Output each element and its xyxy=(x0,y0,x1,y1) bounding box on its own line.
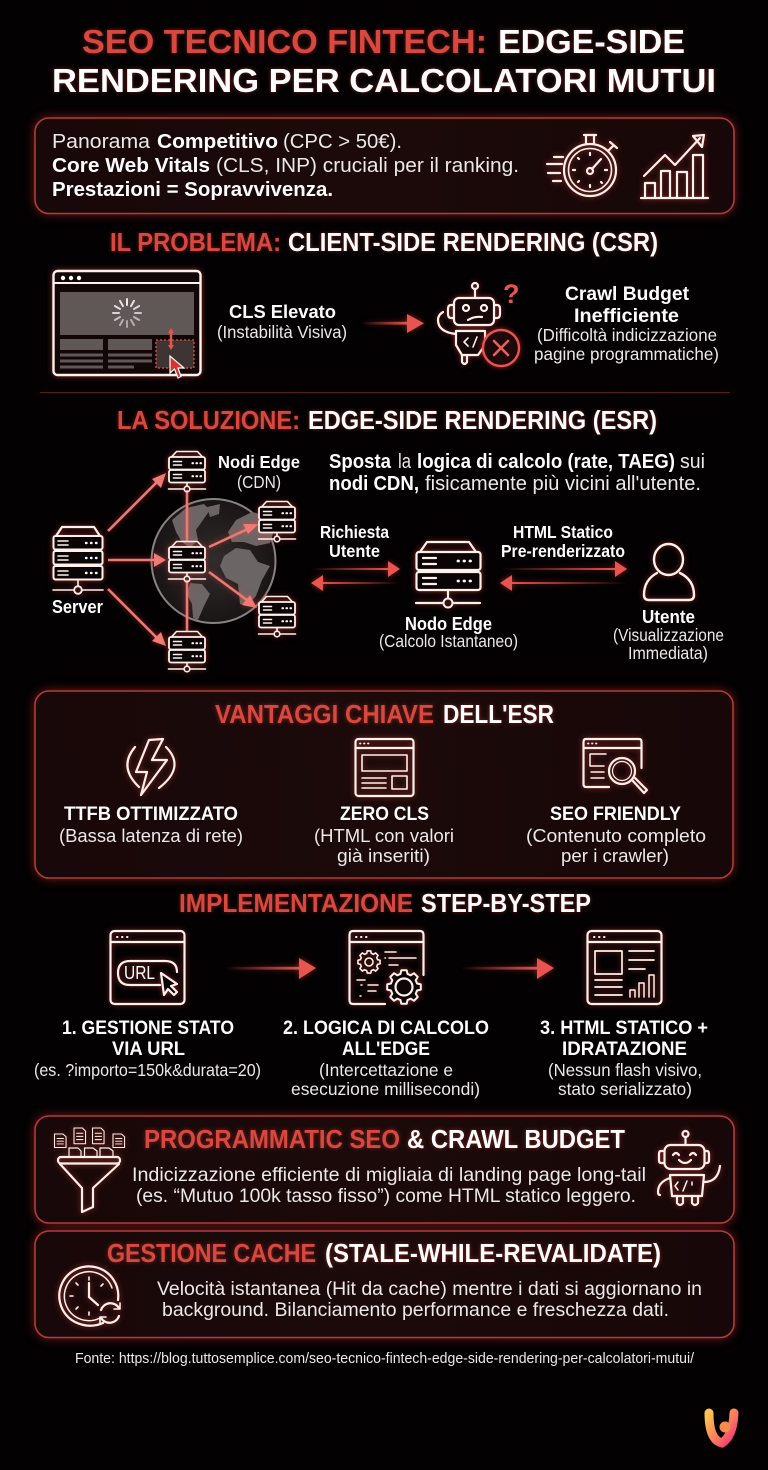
label: cls elevato xyxy=(217,301,347,342)
label: html statico: HTML Statico xyxy=(513,522,613,542)
label: utente: (Visualizzazione xyxy=(613,625,724,645)
icon: browser layout xyxy=(356,739,414,796)
heading: programmatic seo: & CRAWL BUDGET xyxy=(407,1126,625,1154)
heading: implementazione: STEP-BY-STEP xyxy=(421,890,591,918)
step 2 text: ALL'EDGE xyxy=(342,1038,430,1060)
text: programmatic seo xyxy=(132,1164,646,1207)
benefit: ttfb: TTFB OTTIMIZZATO xyxy=(64,803,238,825)
label: crawl budget xyxy=(534,283,719,364)
benefit: seo friendly: per i crawler) xyxy=(561,845,669,866)
title xyxy=(52,23,716,99)
step 2 xyxy=(283,931,489,1099)
intro text: Core Web Vitals xyxy=(52,154,210,177)
label: crawl budget: pagine programmatiche) xyxy=(534,344,719,364)
intro text: (CPC > 50€). xyxy=(283,130,402,153)
label: html statico xyxy=(501,522,625,561)
text: programmatic seo: Indicizzazione efficiente di migliaia di landing page long-tail xyxy=(132,1164,646,1186)
label: richiesta utente: Richiesta xyxy=(320,522,389,542)
text: soluzione description: la xyxy=(398,450,411,473)
spinner xyxy=(113,299,141,327)
icon: happy robot xyxy=(658,1131,720,1205)
logo xyxy=(709,1413,734,1443)
icon: user xyxy=(644,544,694,600)
label: utente xyxy=(613,606,724,663)
heading: il problema: CLIENT-SIDE RENDERING (CSR) xyxy=(288,229,658,257)
label: nodi edge: Nodi Edge xyxy=(218,452,300,472)
icon: url browser: URL xyxy=(124,963,155,983)
step 3 text xyxy=(540,1017,708,1099)
label: crawl budget: Crawl Budget xyxy=(565,283,689,305)
arrow: step 1 to 2 xyxy=(224,958,316,979)
text: soluzione description: sui xyxy=(680,450,705,473)
heading: gestione cache: (STALE-WHILE-REVALIDATE) xyxy=(325,1240,661,1268)
label: cls elevato: (Instabilità Visiva) xyxy=(217,322,347,342)
text: gestione cache xyxy=(157,1278,702,1321)
label: nodi edge xyxy=(218,452,300,492)
text: programmatic seo: (es. “Mutuo 100k tasso fisso”) come HTML statico leggero. xyxy=(136,1185,636,1207)
intro text: (CLS, INP) cruciali per il ranking. xyxy=(216,154,519,177)
label: crawl budget: (Difficoltà indicizzazione xyxy=(537,325,717,345)
title: EDGE-SIDE xyxy=(498,23,685,60)
benefit: ttfb xyxy=(59,803,243,846)
text: soluzione description: logica di calcolo (rate, TAEG) xyxy=(417,450,675,473)
benefit: zero cls: già inseriti) xyxy=(337,845,430,866)
intro text: Competitivo xyxy=(157,130,278,153)
icon: browser with layout shift xyxy=(54,271,200,378)
icon: confused robot: ? xyxy=(503,279,520,309)
icon: confused robot xyxy=(438,279,520,366)
icon: seo browser xyxy=(584,739,647,793)
icons: edge nodes xyxy=(168,452,296,672)
step 2 text xyxy=(283,1017,489,1099)
intro text: Panorama xyxy=(52,130,151,153)
label: richiesta utente: Utente xyxy=(329,541,380,561)
arrow: step 2 to 3 xyxy=(461,958,554,979)
step 2 text: (Intercettazione e xyxy=(319,1060,453,1080)
intro text: Prestazioni = Sopravvivenza. xyxy=(52,178,333,201)
arrows: request xyxy=(311,561,400,591)
label: nodo edge xyxy=(379,613,518,651)
text: soluzione description: nodi CDN, xyxy=(329,472,419,495)
globe xyxy=(152,499,276,623)
heading: vantaggi xyxy=(215,701,554,729)
icon: lightning xyxy=(127,739,175,795)
step 3 text: stato serializzato) xyxy=(558,1079,692,1099)
label: nodo edge: Nodo Edge xyxy=(405,613,492,634)
text: soluzione description xyxy=(329,450,705,495)
step 3 xyxy=(540,931,708,1099)
text: soluzione description: Sposta xyxy=(329,450,392,473)
step 1 text xyxy=(34,1017,261,1080)
heading: implementazione xyxy=(179,890,591,918)
intro text xyxy=(52,130,519,201)
cursor xyxy=(170,356,184,378)
heading: il problema xyxy=(110,229,658,257)
heading: vantaggi: DELL'ESR xyxy=(443,701,554,729)
heading: vantaggi: VANTAGGI CHIAVE xyxy=(215,701,434,729)
icon: static page browser xyxy=(588,931,662,1004)
step 1 text: (es. ?importo=150k&durata=20) xyxy=(34,1060,261,1080)
heading: programmatic seo: PROGRAMMATIC SEO xyxy=(144,1126,400,1154)
server arrows xyxy=(108,473,259,646)
heading: il problema: IL PROBLEMA: xyxy=(110,229,281,257)
text: gestione cache: Velocità istantanea (Hit da cache) mentre i dati si aggiornano in xyxy=(157,1278,702,1300)
heading: implementazione: IMPLEMENTAZIONE xyxy=(179,890,413,918)
diagram: cdn network xyxy=(52,452,300,672)
heading: la soluzione: EDGE-SIDE RENDERING (ESR) xyxy=(308,407,657,435)
benefit: zero cls: (HTML con valori xyxy=(314,825,454,846)
step 2 text: esecuzione millisecondi) xyxy=(291,1079,480,1099)
icon: stopwatch xyxy=(547,135,617,196)
benefit: seo friendly: (Contenuto completo xyxy=(526,825,706,846)
panel: programmatic seo xyxy=(35,1116,734,1223)
panel: gestione cache xyxy=(35,1231,734,1338)
label: server: Server xyxy=(52,596,103,617)
label: utente: Utente xyxy=(642,606,695,627)
title: SEO TECNICO FINTECH: xyxy=(82,23,487,60)
label: nodi edge: (CDN) xyxy=(237,472,281,492)
label: cls elevato: CLS Elevato xyxy=(229,301,336,322)
icon: origin server xyxy=(53,527,103,594)
step 1 text: 1. GESTIONE STATO xyxy=(62,1017,234,1039)
icon: growth chart xyxy=(641,135,708,198)
step 3 text: (Nessun flash visivo, xyxy=(548,1060,702,1080)
benefit: zero cls xyxy=(314,803,454,866)
panel: panorama competitivo xyxy=(35,118,734,214)
label: crawl budget: Inefficiente xyxy=(574,305,679,327)
source line: Fonte: https://blog.tuttosemplice.com/seo-tecnico-fintech-edge-side-rendering-per-calcolatori-mutui/ xyxy=(75,1351,695,1367)
icon: clock with refresh xyxy=(59,1266,120,1326)
label: richiesta utente xyxy=(320,522,389,561)
benefit: zero cls: ZERO CLS xyxy=(340,803,429,825)
step 1 xyxy=(34,931,261,1080)
heading: gestione cache xyxy=(107,1240,661,1268)
heading: la soluzione xyxy=(117,407,657,435)
step 3 text: 3. HTML STATICO + xyxy=(540,1017,708,1039)
benefit: ttfb: (Bassa latenza di rete) xyxy=(59,825,243,846)
icon: nodo edge server xyxy=(416,542,480,608)
benefit: seo friendly xyxy=(526,803,706,866)
step 2 text: 2. LOGICA DI CALCOLO xyxy=(283,1017,489,1039)
icon: gear browser xyxy=(350,931,424,1004)
icon: funnel with documents xyxy=(54,1128,125,1212)
text: soluzione description: fisicamente più vicini all'utente. xyxy=(425,472,701,495)
heading: gestione cache: GESTIONE CACHE xyxy=(107,1240,316,1268)
text: gestione cache: background. Bilanciamento performance e freschezza dati. xyxy=(162,1299,669,1321)
panel: vantaggi chiave xyxy=(35,691,733,878)
step 1 text: VIA URL xyxy=(112,1038,185,1060)
heading: programmatic seo xyxy=(144,1126,625,1154)
arrows: response xyxy=(500,561,627,591)
arrow: cls to crawl budget xyxy=(361,314,424,333)
label: utente: Immediata) xyxy=(628,643,708,663)
heading: la soluzione: LA SOLUZIONE: xyxy=(117,407,300,435)
title: RENDERING PER CALCOLATORI MUTUI xyxy=(52,62,716,99)
label: nodo edge: (Calcolo Istantaneo) xyxy=(379,631,518,651)
step 3 text: IDRATAZIONE xyxy=(562,1038,687,1060)
icon: url browser xyxy=(110,931,184,1004)
label: html statico: Pre-renderizzato xyxy=(501,541,625,561)
benefit: seo friendly: SEO FRIENDLY xyxy=(550,803,681,825)
